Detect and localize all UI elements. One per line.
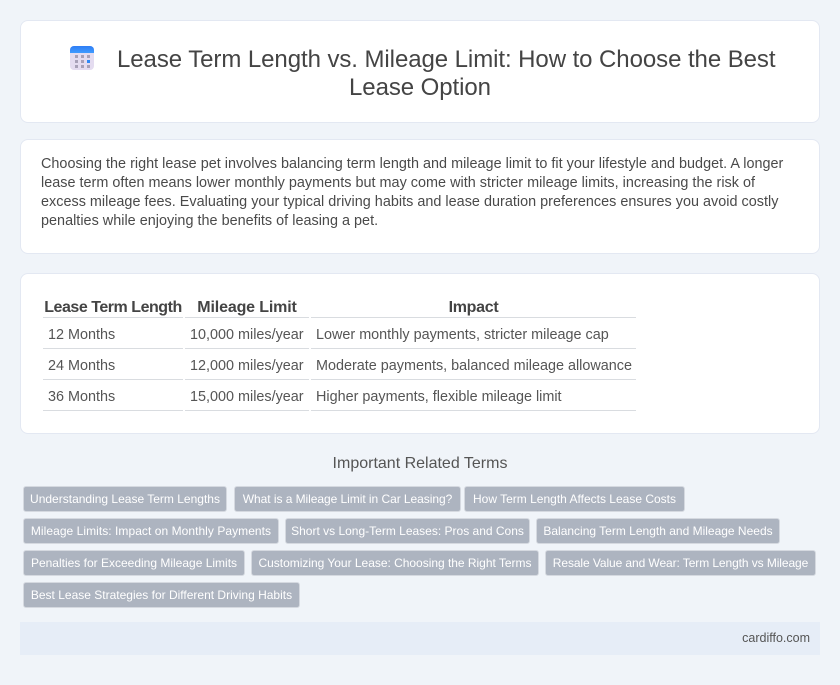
text block: introduction: penalties while enjoying the benefits of leasing a pet. bbox=[41, 213, 378, 229]
panel: related term tags: Understanding Lease Term Lengths bbox=[30, 492, 220, 506]
panel: related term tags: Best Lease Strategies for Different Driving Habits bbox=[31, 588, 292, 602]
icon: calendar bbox=[70, 46, 94, 70]
panel: comparison table bbox=[20, 273, 820, 434]
icon: highlighted date bbox=[87, 60, 90, 63]
panel: related term tags: Customizing Your Lease: Choosing the Right Terms bbox=[258, 556, 531, 570]
table: lease terms bbox=[43, 299, 636, 411]
panel: title card bbox=[20, 20, 820, 123]
panel: related term tags: Mileage Limits: Impact on Monthly Payments bbox=[31, 524, 271, 538]
footer: source: cardiffo.com bbox=[742, 631, 810, 645]
text block: introduction: excess mileage fees. Evaluating your typical driving habits and lease duration preferences ensures you avoid costly bbox=[41, 194, 778, 210]
footer bbox=[20, 622, 820, 655]
table: lease terms: 24 Months bbox=[48, 358, 115, 374]
table: lease terms: 12 Months bbox=[48, 327, 115, 343]
panel: related term tags: Penalties for Exceeding Mileage Limits bbox=[31, 556, 237, 570]
table: lease terms: Mileage Limit bbox=[197, 299, 297, 316]
table: lease terms: 15,000 miles/year bbox=[190, 389, 304, 405]
panel: related term tags: Short vs Long-Term Leases: Pros and Cons bbox=[291, 524, 524, 538]
title: Lease Option bbox=[349, 74, 491, 101]
heading: related terms: Important Related Terms bbox=[333, 455, 507, 472]
panel: related term tags: Balancing Term Length and Mileage Needs bbox=[543, 524, 773, 538]
table: lease terms: Higher payments, flexible mileage limit bbox=[316, 389, 562, 405]
title: Lease Term Length vs. Mileage Limit: How to Choose the Best bbox=[117, 46, 775, 73]
panel: introduction bbox=[20, 139, 820, 254]
text block: introduction: Choosing the right lease pet involves balancing term length and mileage limit to fit your lifestyle and budget. A longer bbox=[41, 156, 783, 172]
panel: related term tags bbox=[23, 486, 816, 608]
table: lease terms: Moderate payments, balanced mileage allowance bbox=[316, 358, 632, 374]
panel: related term tags: What is a Mileage Limit in Car Leasing? bbox=[243, 492, 452, 506]
table: lease terms: 12,000 miles/year bbox=[190, 358, 304, 374]
table: lease terms: Impact bbox=[449, 299, 498, 316]
table: lease terms: 36 Months bbox=[48, 389, 115, 405]
table: lease terms: Lower monthly payments, stricter mileage cap bbox=[316, 327, 609, 343]
table: lease terms: Lease Term Length bbox=[44, 299, 182, 316]
table: lease terms: 10,000 miles/year bbox=[190, 327, 304, 343]
panel: related term tags: How Term Length Affects Lease Costs bbox=[473, 492, 676, 506]
panel: related term tags: Resale Value and Wear: Term Length vs Mileage bbox=[553, 556, 808, 570]
title bbox=[117, 46, 776, 101]
text block: introduction: lease term often means lower monthly payments but may come with stricter mileage limits, increasing the risk of bbox=[41, 175, 755, 191]
text block: introduction bbox=[41, 156, 784, 229]
